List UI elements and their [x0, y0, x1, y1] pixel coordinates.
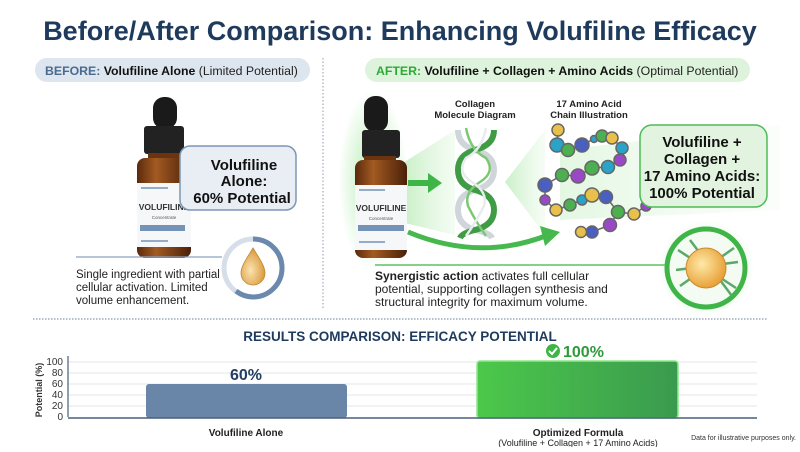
- vertical divider: [322, 58, 324, 308]
- amino label: 17 Amino Acid: [556, 99, 622, 110]
- text: after description: [375, 265, 665, 309]
- text: before description: Single ingredient with partial: [76, 269, 220, 281]
- bottle: volufiline with glow: Concentrate: [369, 216, 394, 221]
- callout: 60% potential: Volufiline: [211, 157, 277, 174]
- bar: volufiline alone: [146, 367, 347, 439]
- bar: volufiline alone: 60%: [230, 367, 262, 384]
- text: before description: volume enhancement.: [76, 295, 189, 307]
- collagen label: Collagen: [455, 99, 495, 110]
- bar: volufiline alone: Volufiline Alone: [209, 428, 284, 439]
- before header pill: BEFORE: Volufiline Alone (Limited Potential): [45, 64, 298, 78]
- panel: after: [338, 58, 780, 316]
- callout: 100% potential: Volufiline +: [662, 134, 742, 151]
- y axis: 20: [52, 401, 63, 412]
- bar: optimized formula: [470, 344, 685, 448]
- callout: 60% potential: Alone:: [221, 173, 267, 190]
- y axis: 80: [52, 368, 63, 379]
- icon: collagen helix: [458, 128, 494, 238]
- callout: 100% potential: [640, 125, 767, 207]
- text: before description: cellular activation. Limited: [76, 282, 208, 294]
- callout: 100% potential: 17 Amino Acids:: [644, 168, 760, 185]
- callout: 100% potential: Collagen +: [664, 151, 740, 168]
- text: after description: Synergistic action activates full cellular: [375, 269, 589, 283]
- bar: optimized formula: Optimized Formula: [533, 428, 624, 439]
- after header pill: AFTER: Volufiline + Collagen + Amino Acids (Optimal Potential): [376, 64, 738, 78]
- icon: amino acid chain: [538, 124, 651, 238]
- chart title: RESULTS COMPARISON: EFFICACY POTENTIAL: [243, 329, 557, 344]
- y axis: 100: [46, 357, 63, 368]
- bottle: volufiline with glow: VOLUFILINE: [356, 203, 407, 213]
- y axis: 60: [52, 379, 63, 390]
- y axis: Potential (%): [34, 363, 44, 417]
- bottle: volufiline alone: VOLUFILINE: [139, 202, 190, 212]
- y axis: 0: [57, 412, 63, 423]
- arrow: bottle to collagen: [408, 173, 442, 193]
- bottle: volufiline alone: Concentrate: [152, 215, 177, 220]
- panel: before: [35, 58, 310, 307]
- y axis: [34, 357, 63, 423]
- text: after description: structural integrity for maximum volume.: [375, 295, 588, 309]
- amino label: Chain Illustration: [550, 110, 628, 121]
- horizontal divider: [33, 318, 767, 320]
- bottle: volufiline alone: [137, 97, 191, 258]
- title: Before/After Comparison: Enhancing Volufiline Efficacy: [43, 16, 757, 46]
- arrow: curved sweep to amino acids: [408, 226, 560, 248]
- y axis: 40: [52, 390, 63, 401]
- icon: drop ring gauge: [76, 239, 282, 297]
- chart: results comparison: [34, 329, 796, 448]
- bar: optimized formula: 100%: [563, 344, 604, 361]
- collagen label: Molecule Diagram: [434, 110, 516, 121]
- green light beams: [338, 90, 780, 270]
- text: after description: potential, supporting collagen synthesis and: [375, 282, 608, 296]
- after header pill: [365, 58, 750, 82]
- callout: 60% potential: [180, 146, 296, 210]
- bottle: volufiline with glow: [355, 96, 407, 258]
- before header pill: [35, 58, 310, 82]
- icon: cell with collagen network: [658, 220, 754, 316]
- callout: 60% potential: 60% Potential: [193, 190, 291, 207]
- footnote: Data for illustrative purposes only.: [691, 435, 796, 442]
- callout: 100% potential: 100% Potential: [649, 185, 755, 202]
